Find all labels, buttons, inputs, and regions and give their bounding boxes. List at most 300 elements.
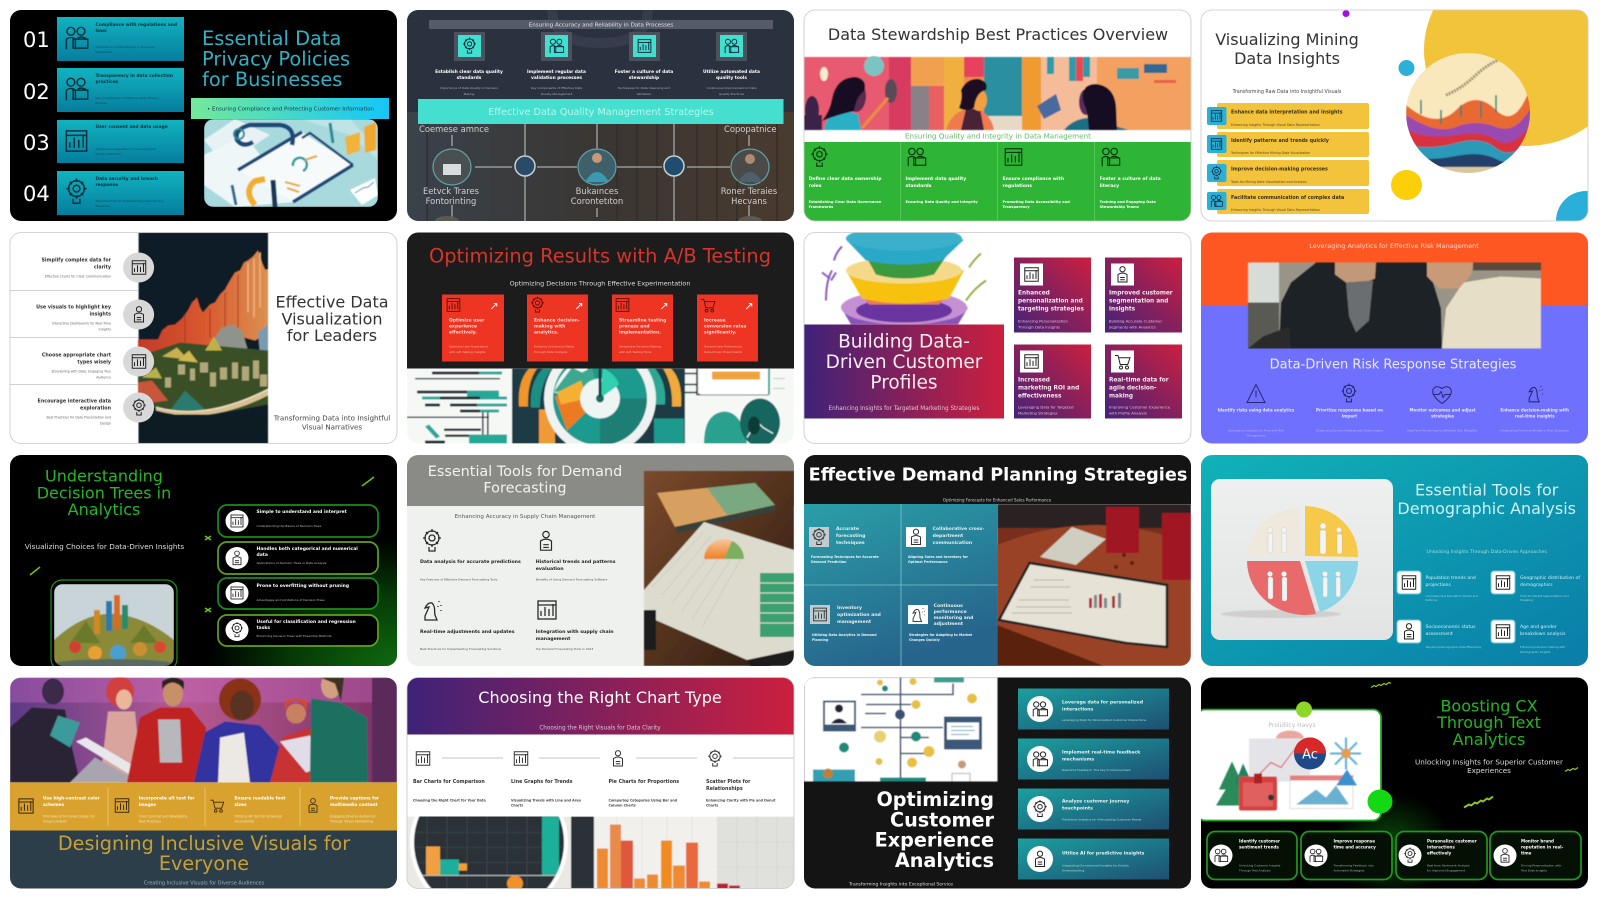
item: classification: Useful for classification and regression: [256, 619, 356, 625]
subtitle bar: • Ensuring Compliance and Protecting Customer Information: [207, 106, 375, 112]
column: literacy: [1100, 148, 1161, 209]
column: enhance decisions: Enhance decision-making with: [1500, 408, 1569, 412]
tile: inventory: management: [837, 619, 872, 625]
item: interpretation: Enhance data interpretation and insights: [1231, 110, 1343, 116]
item: chart types: Choose appropriate chart: [42, 352, 112, 358]
column: compliance: regulations: [1002, 183, 1032, 189]
item: decisions: Improve decision-making processes: [1231, 166, 1328, 172]
tile: real-time data: Improving Customer Experience: [1109, 404, 1171, 410]
column: monitor: [1407, 387, 1478, 432]
tile: monitoring: monitoring and: [934, 615, 973, 621]
item: socioeconomic: [1397, 620, 1482, 649]
tile: monitoring: adjustment: [934, 621, 964, 627]
step 04: Data security and breach: [96, 176, 158, 182]
photo captions: Copopatnice: [724, 124, 777, 134]
column: compliance: Ensure compliance with: [1002, 176, 1064, 182]
photo captions: Roner Teraies: [721, 186, 777, 196]
card: decision making: [527, 294, 588, 362]
item: simplify: clarity: [94, 264, 112, 270]
accent dots: [1296, 702, 1392, 814]
item: patterns: [1207, 132, 1369, 157]
column: quality standards: [906, 148, 978, 204]
image: clock and data illustration: [407, 342, 794, 454]
image: customer network illustration: [804, 678, 998, 782]
tile: personalization: Through Data Insights: [1017, 324, 1060, 330]
card: user experience: Optimize user: [449, 318, 485, 324]
item: pie charts: Comparing Categories Using Bar and: [608, 798, 678, 802]
item: population trends: Understanding Population Trends and: [1426, 594, 1478, 598]
column: ownership: [809, 146, 882, 209]
step 01: laws: [96, 28, 107, 34]
item: visuals: [36, 300, 154, 332]
item: real-time adjustments: Real-time adjustments and updates: [420, 629, 515, 635]
item: historical trends: [536, 531, 616, 582]
card: conversion: Increase: [704, 318, 726, 324]
title: Effective Demand Planning Strategies: [809, 466, 1187, 486]
title block: Designing Inclusive Visuals for: [58, 832, 350, 855]
item: population trends: projections: [1426, 582, 1451, 588]
item: simple to understand: Understanding the Basics of Decision Trees: [256, 524, 322, 528]
panel: Essential Data Privacy Policies slide: [10, 10, 397, 221]
tile: forecasting: Demand Prediction: [811, 560, 847, 564]
item: brand reputation: Text Data Insights: [1520, 868, 1547, 872]
image: tablet on table: [997, 504, 1191, 666]
column: prioritize: Enhancing Decision-Making with Data Insights: [1316, 428, 1383, 432]
item: personalize interactions: effectively: [1427, 850, 1452, 856]
item: journey: [1018, 788, 1169, 830]
title: Analytics: [895, 849, 994, 872]
title: [37, 466, 171, 519]
subtitle: Experiences: [1467, 766, 1511, 775]
title: Forecasting: [483, 480, 567, 496]
column: stewardship: Validation: [637, 92, 651, 96]
subtitle: Optimizing Decisions Through Effective Experimentation: [510, 280, 690, 288]
image: analytics dashboard panel: Prolidiicy Havys: [1268, 722, 1316, 729]
column: identify risks: Management: [1246, 434, 1266, 438]
item: historical trends: Historical trends and patterns: [536, 559, 616, 565]
tile: monitoring: Continuous: [934, 603, 963, 609]
subtitle: Enhancing Accuracy in Supply Chain Management: [455, 514, 596, 520]
column: literacy: Foster a culture of data: [1100, 176, 1161, 182]
item: font sizes: Utilizing Alt Text for Enhanced: [234, 814, 282, 818]
item: data analysis: Data analysis for accurate predictions: [420, 559, 521, 565]
item: historical trends: Benefits of Using Demand Forecasting Software: [536, 578, 607, 582]
step 01: 01: [23, 28, 50, 52]
item: exploration: exploration: [80, 406, 112, 412]
tile: segmentation: Building Accurate Customer: [1109, 318, 1163, 324]
title banner: Effective Data Quality Management Strategies: [488, 107, 714, 118]
panel: Effective Data Quality Management slide: [407, 10, 794, 226]
item: color schemes: Visual Content: [43, 820, 67, 824]
item: overfitting: Prone to overfitting without pruning: [256, 583, 349, 589]
title: Essential Data: [202, 27, 341, 50]
gold band: [10, 782, 397, 830]
item: socioeconomic: Targeting Demographic Data Effectively: [1424, 645, 1482, 649]
tile: personalization: Enhancing Personalization: [1018, 318, 1068, 324]
item: alt text: Best Practices: [139, 820, 161, 824]
subtitle: Visual Narratives: [302, 422, 362, 432]
item: exploration: Encourage interactive data: [38, 398, 111, 404]
subtitle: Unlocking Insights Through Data-Driven Approaches: [1427, 549, 1547, 555]
item: chart types: [42, 346, 154, 380]
column: validation: Implement regular data: [527, 69, 586, 75]
green glow: [1331, 782, 1452, 888]
column: literacy: Training and Engaging Data: [1100, 200, 1156, 204]
subtitle: Transforming Raw Data into Insightful Visuals: [1232, 89, 1342, 95]
step 01: Importance of Data Privacy in Business: [96, 45, 155, 49]
tile: forecasting: Accurate: [836, 526, 859, 532]
column: ownership: Frameworks: [809, 205, 833, 209]
tile: inventory: optimization and: [837, 612, 881, 618]
column: literacy: Stewardship Teams: [1100, 205, 1139, 209]
step 02: Key Components of Effective Data Privacy: [96, 96, 159, 100]
tile: real-time data: making: [1109, 394, 1133, 400]
tile: cross-department: Collaborative cross-: [933, 526, 984, 532]
item: simplify: [41, 252, 154, 282]
tile: forecasting: forecasting: [836, 533, 865, 539]
card: user experience: [442, 294, 504, 362]
item: socioeconomic: Socioeconomic status: [1426, 624, 1476, 630]
step 02: Transparency in data collection: [96, 73, 173, 79]
title block: Everyone: [159, 852, 249, 875]
step 01: Compliance with regulations and: [96, 22, 177, 28]
card: decision making: through Data Analysis: [534, 350, 568, 354]
photo captions: Fontorinting: [426, 196, 476, 206]
column: stewardship: Techniques for Data Cleansing and: [617, 86, 670, 90]
panel: Effective Data Visualization slide: [10, 232, 397, 444]
tile: marketing ROI: Marketing Strategies: [1018, 410, 1058, 416]
step 02: practices: [96, 79, 119, 85]
item: population trends: [1397, 571, 1478, 602]
item: bar charts: Choosing the Right Chart for Your Data: [413, 798, 486, 802]
title band: Choosing the Right Visuals for Data Clarity: [539, 726, 661, 732]
title block: [10, 830, 397, 888]
tile: marketing ROI: marketing ROI and: [1018, 386, 1079, 392]
column: validation: validation processes: [531, 75, 582, 81]
row dividers: [10, 290, 138, 384]
item: categorical and numerical: data: [256, 552, 268, 558]
item: personalized interactions: Leverage data for personalized: [1062, 700, 1143, 706]
step 04: 04: [23, 182, 50, 206]
item: brand reputation: [1490, 832, 1581, 880]
tile: monitoring: Changes Quickly: [909, 638, 941, 642]
item: font sizes: sizes: [234, 802, 247, 808]
tile: personalization: Enhanced: [1018, 290, 1050, 296]
item: visuals: Interactive Dashboards for Real-Time: [52, 322, 111, 326]
item: interpretation: [1207, 103, 1369, 129]
item: visuals: insights: [89, 312, 111, 318]
column: automated tools: Utilize automated data: [703, 69, 760, 75]
item: alt text: Color Contrast and Readability: [139, 814, 187, 818]
card: conversion: ↗: [744, 300, 754, 312]
tile: personalization: targeting strategies: [1018, 306, 1084, 312]
item: bar charts: [413, 752, 486, 802]
item: supply chain integration: Integration with supply chain: [536, 629, 614, 635]
photo captions: Hecvans: [731, 196, 767, 206]
item: line graphs: Charts: [511, 804, 523, 808]
item: classification: [218, 615, 378, 646]
column: ownership: roles: [809, 183, 822, 189]
item: data analysis: Key Features of Effective Demand Forecasting Tools: [420, 578, 498, 582]
subtitle: [273, 414, 390, 432]
title: [1215, 30, 1359, 68]
item: bar charts: Bar Charts for Comparison: [413, 779, 485, 785]
image: layered funnel: [822, 226, 986, 324]
item: population trends: Patterns: [1426, 598, 1438, 602]
title: Demographic Analysis: [1397, 499, 1576, 518]
tile: real-time data: [1105, 344, 1182, 418]
title: [428, 464, 622, 496]
item: supply chain integration: management: [536, 636, 571, 642]
item: line graphs: Visualizing Trends with Line and Area: [511, 798, 581, 802]
step 02: 02: [23, 80, 50, 104]
column: compliance: Promoting Data Accessibility and: [1002, 200, 1070, 204]
subtitle: Visualizing Choices for Data-Driven Insights: [25, 542, 184, 551]
card: decision making: ↗: [574, 300, 584, 312]
item: sentiment trends: sentiment trends: [1239, 844, 1279, 850]
item: journey: Predictive Analytics for Anticipating Customer Needs: [1062, 818, 1142, 822]
item: classification: tasks: [256, 625, 270, 631]
item: personalized interactions: [1018, 688, 1169, 730]
item: sentiment trends: Identify customer: [1239, 838, 1280, 844]
tile: cross-department: department: [933, 533, 964, 539]
panel: Data-Driven Risk Response slide: [1201, 232, 1588, 444]
column: stewardship: stewardship: [629, 75, 659, 81]
card: streamline: [612, 294, 673, 362]
title: for Leaders: [287, 326, 377, 345]
item: pie charts: [608, 751, 679, 808]
item: interpretation: Enhancing Insights Through Visual Data Representation: [1231, 123, 1320, 127]
title: Data-Driven Risk Response Strategies: [1270, 358, 1517, 372]
photo captions: Corontetıton: [571, 196, 623, 206]
item: response time: Actionable Strategies: [1334, 868, 1365, 872]
item: journey: Analyze customer journey: [1062, 798, 1129, 804]
subtitle: [1415, 758, 1563, 775]
item: alt text: images: [139, 802, 156, 808]
panel: Data Stewardship slide: [804, 10, 1191, 221]
step 03: User consent and data usage: [96, 124, 168, 130]
item: chart types: Audience: [96, 376, 111, 380]
title block: Driven Customer: [826, 352, 983, 373]
item: scatter plots: Charts: [706, 804, 718, 808]
card: decision making: making with: [534, 324, 565, 330]
item: age and gender: Age and gender: [1520, 624, 1557, 630]
tile: marketing ROI: Increased: [1018, 378, 1050, 384]
panel: Boosting CX Through Text Analytics slide: [1197, 678, 1588, 888]
column: enhance decisions: real-time insights: [1515, 414, 1555, 418]
title: Customer: [890, 808, 995, 832]
panel: Essential Tools for Demographic Analysis slide: [1201, 455, 1588, 666]
item: personalize interactions: for Improved Engagement: [1427, 868, 1466, 872]
step 03: Privacy Practices: [96, 152, 121, 156]
item: geographic distribution: Geographic distribution of: [1520, 575, 1580, 581]
card: decision making: Enhance decision-: [534, 318, 580, 324]
item: exploration: [38, 392, 154, 426]
item: historical trends: evaluation: [536, 566, 564, 572]
item: exploration: Design: [100, 422, 111, 426]
background arch: [552, 10, 648, 43]
column: monitor: Real-Time Monitoring for Effective Risk Mitigation: [1407, 428, 1478, 432]
decorative circles: [1342, 10, 1588, 221]
item: pie charts: Column Charts: [608, 804, 636, 808]
image: demographic pie: [1211, 479, 1393, 640]
subtitle: Leveraging Analytics for Effective Risk Management: [1309, 242, 1479, 250]
item: decisions: [1207, 160, 1369, 186]
item: alt text: Incorporate alt text for: [139, 796, 195, 802]
image: diverse group with devices: [10, 672, 397, 782]
item: feedback: Implement real-time feedback: [1062, 750, 1141, 756]
item: data analysis: [420, 529, 521, 582]
title: Optimizing Results with A/B Testing: [429, 244, 771, 268]
item: AI insights: Utilize AI for predictive insights: [1062, 850, 1145, 856]
item: age and gender: breakdown analysis: [1520, 631, 1566, 637]
item: color schemes: schemes: [43, 802, 64, 808]
image: forecasting book on desk: [644, 471, 794, 669]
tile: cross-department: communication: [933, 540, 972, 546]
panel: Effective Demand Planning slide: [804, 455, 1191, 666]
subtitle: Transforming Data into Insightful: [273, 414, 390, 422]
step 03: 03: [23, 131, 50, 155]
header band: [429, 20, 773, 29]
title: [1397, 480, 1576, 518]
title block: [804, 324, 1004, 418]
photo captions: [419, 124, 777, 206]
item: scatter plots: Enhancing Clarity with Pie and Donut: [706, 798, 776, 802]
decorative squiggles: [1371, 682, 1578, 808]
title: Through Text: [1436, 713, 1541, 732]
card: conversion: conversion rates: [704, 324, 747, 330]
tile: segmentation: segmentation and: [1109, 298, 1168, 304]
column: identify risks: Leveraging Analytics for Proactive Risk: [1228, 428, 1284, 432]
title block: Enhancing Insights for Targeted Marketing Strategies: [828, 406, 980, 412]
card: user experience: Optimize User Experience: [449, 344, 488, 348]
item: socioeconomic: assessment: [1426, 631, 1453, 637]
item: color schemes: Principles of Inclusive Design for: [43, 814, 95, 818]
item: decisions: Tools for Mining Data Visualization and Analysis: [1230, 180, 1307, 184]
title: Optimizing: [876, 788, 994, 811]
item: AI insights: Understanding: [1062, 868, 1084, 872]
item: population trends: Population trends and: [1426, 575, 1476, 581]
column: prioritize: Prioritize responses based on: [1316, 408, 1383, 412]
item: exploration: Best Practices for Data Presentation and: [46, 416, 111, 420]
item: chart types: types wisely: [77, 360, 112, 366]
title: Decision Trees in: [37, 484, 171, 502]
panel: Choosing the Right Chart Type slide: [407, 678, 794, 900]
step 04: response: [96, 182, 118, 188]
column: automated tools: Quality Practices: [719, 92, 745, 96]
item: scatter plots: [706, 750, 776, 808]
panel: Building Data-Driven Customer Profiles slide: [804, 226, 1191, 444]
item: categorical and numerical: Handles both categorical and numerical: [256, 546, 358, 552]
column: automated tools: Continuous Improvement in Data: [707, 86, 757, 90]
item: geographic distribution: Targeting: [1519, 598, 1533, 602]
title: Essential Tools for Demand: [428, 464, 622, 480]
column: enhance decisions: Integrating Predictive Models in Risk Strategies: [1500, 428, 1569, 432]
image: two colleagues photo: [1248, 262, 1541, 348]
item: communication: [1207, 189, 1369, 214]
step 03: Compliance Regulations Impacting Data: [96, 147, 156, 151]
tile: monitoring: Strategies for Adapting to Market: [909, 633, 972, 637]
item: real-time adjustments: [420, 601, 515, 651]
item: captions: Through Visual Storytelling: [329, 820, 373, 824]
column: data quality standards: standards: [457, 75, 482, 81]
item: classification: Enhancing Decision Trees with Ensemble Methods: [256, 634, 332, 638]
item: personalize interactions: [1396, 832, 1487, 880]
column: quality standards: Implement data quality: [906, 176, 966, 182]
step 01: Operations: [96, 50, 112, 54]
panel: Visualizing Mining Data slide: [1207, 10, 1588, 221]
column: monitor: strategies: [1431, 414, 1455, 418]
card: streamline: Streamline Decision-Making: [619, 344, 661, 348]
title: Effective Data: [275, 292, 389, 312]
item: visuals: Use visuals to highlight key: [36, 304, 112, 310]
image: 3D data mountains: [138, 232, 268, 444]
tile: marketing ROI: effectiveness: [1018, 394, 1062, 400]
item: font sizes: [210, 796, 285, 824]
item: personalized interactions: Leveraging Data for Personalized Customer Interactions: [1062, 718, 1147, 722]
item: scatter plots: Scatter Plots for: [706, 779, 751, 785]
item: captions: multimedia content: [330, 802, 378, 808]
item: age and gender: Demographic Insights: [1520, 650, 1551, 654]
column: quality standards: Ensuring Data Quality and Integrity: [906, 200, 978, 204]
item: chart types: Storytelling with Data: Engaging Your: [51, 370, 112, 374]
card: user experience: effectively.: [449, 330, 477, 336]
title: [1436, 696, 1541, 749]
tile: cross-department: [906, 526, 984, 564]
item: age and gender: [1491, 620, 1566, 654]
item: simple to understand: Simple to understand and interpret: [256, 509, 348, 515]
item: AI insights: [1018, 838, 1169, 880]
tile: forecasting: techniques: [836, 540, 865, 546]
card: streamline: with A/B Testing Tools: [619, 350, 652, 354]
card: streamline: ↗: [659, 300, 669, 312]
title: Privacy Policies: [202, 48, 350, 70]
step 04: Measures: [96, 204, 110, 208]
item: geographic distribution: Tools for Market Segmentation and: [1519, 594, 1569, 598]
tile: inventory: [810, 605, 881, 642]
image: privacy illustration: [204, 119, 378, 207]
step 04: [23, 171, 184, 215]
tile: personalization: personalization and: [1018, 298, 1083, 304]
step 02: [23, 68, 184, 112]
item: personalize interactions: Real-time Sentiment Analysis: [1427, 864, 1470, 868]
item: sentiment trends: [1207, 832, 1297, 880]
image: analytics dashboard panel: [1197, 710, 1381, 820]
card: user experience: ↗: [489, 300, 499, 312]
title banner: [418, 99, 784, 124]
tile: cross-department: Optimal Performance: [908, 560, 948, 564]
photo captions: Eetvck Trares: [423, 186, 479, 196]
title: [875, 788, 995, 872]
panel: Designing Inclusive Visuals slide: [10, 672, 397, 888]
tile: segmentation: [1105, 258, 1182, 332]
title block: Creating Inclusive Visuals for Diverse Audiences: [144, 880, 265, 886]
teal panel: [804, 504, 998, 666]
title: Experience: [875, 828, 994, 852]
item: pie charts: Pie Charts for Proportions: [608, 779, 679, 785]
column: prioritize: [1316, 384, 1383, 432]
panel: Understanding Decision Trees slide: [10, 455, 397, 670]
tile: inventory: Inventory: [837, 605, 862, 611]
column: data quality standards: Importance of Data Quality in Decision: [440, 86, 498, 90]
item: personalize interactions: Personalize customer: [1427, 838, 1477, 844]
item: communication: Facilitate communication of complex data: [1231, 195, 1344, 201]
item: brand reputation: Driving Personalization with: [1521, 864, 1561, 868]
item: personalize interactions: interactions: [1427, 844, 1455, 850]
title block: Building Data-: [838, 332, 970, 352]
title: [202, 30, 350, 86]
title band: Choosing the Right Chart Type: [478, 688, 722, 707]
